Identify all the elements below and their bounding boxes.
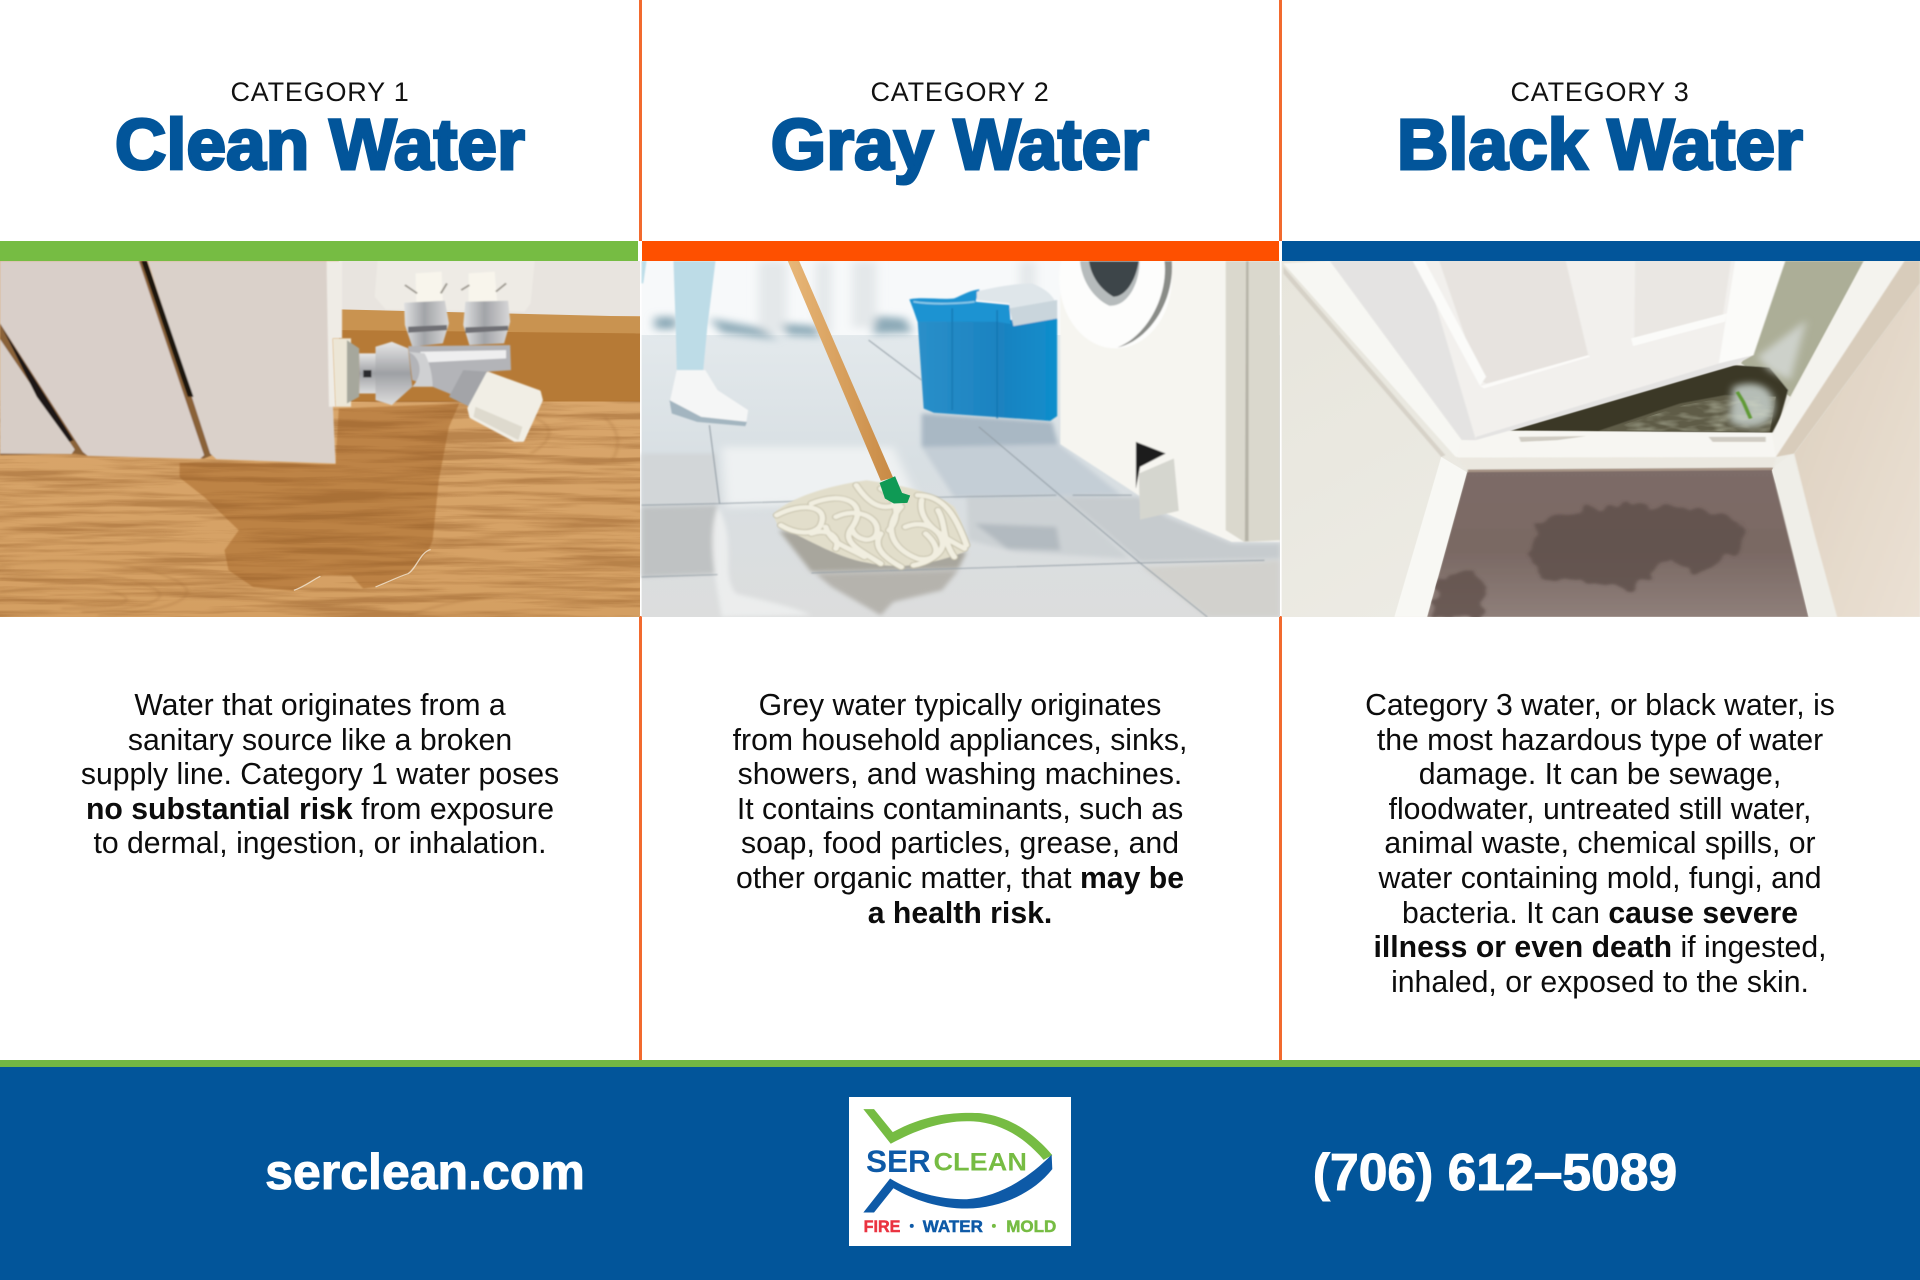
- photo: leaking radiator valve on wood floor: [0, 261, 640, 617]
- description: category 3: the most hazardous type of water: [1377, 724, 1823, 757]
- description: category 3: illness or even death if ingested,: [1373, 931, 1827, 964]
- footer band: [0, 1060, 1920, 1280]
- door frame right: [1771, 261, 1904, 457]
- panel: category 2 gray water: [640, 77, 1280, 930]
- outdoor area: [1741, 261, 1864, 397]
- description: category 3: [1365, 689, 1835, 999]
- carpet: [1427, 470, 1809, 617]
- website: serclean.com: [265, 1144, 585, 1200]
- description: category 1: to dermal, ingestion, or inhalation.: [93, 827, 547, 860]
- tile joints and reflections: [642, 413, 1280, 617]
- phone number: (706) 612–5089: [1313, 1143, 1677, 1201]
- door: [1330, 261, 1785, 441]
- description: category 2: Grey water typically originates: [759, 689, 1161, 722]
- divider: columns 2 and 3, bottom: [1278, 616, 1282, 1060]
- description: category 3: water containing mold, fungi, and: [1378, 862, 1822, 895]
- logo: wordmark: CLEAN: [933, 1148, 1027, 1176]
- mop ferrule: [880, 476, 910, 504]
- divider: columns 1 and 2, top: [638, 0, 642, 241]
- logo: Serclean fish mark: [849, 1097, 1071, 1246]
- panel: category 1 clean water: [0, 77, 640, 860]
- photo: flooded doorway with stained carpet: [1282, 261, 1920, 617]
- photo: mop on wet tile floor beside washing machine: [640, 261, 1280, 617]
- description: category 2: It contains contaminants, such as: [737, 793, 1183, 826]
- description: category 3: animal waste, chemical spills, or: [1384, 827, 1816, 860]
- door frame left: [1283, 261, 1464, 457]
- description: category 3: inhaled, or exposed to the skin.: [1391, 966, 1809, 999]
- logo: blue fish arc: [863, 1155, 1052, 1213]
- divider: columns 1 and 2, bottom: [638, 616, 642, 1060]
- divider: columns 2 and 3, top: [1278, 0, 1282, 241]
- description: category 1: no substantial risk from exposure: [86, 793, 554, 826]
- logo: green fish arc: [863, 1109, 1052, 1160]
- panel: category 3 black water: [1282, 77, 1920, 999]
- heading: gray water: Gray Water: [771, 106, 1149, 185]
- description: category 2: a health risk.: [868, 897, 1052, 930]
- description: category 1: sanitary source like a broken: [128, 724, 512, 757]
- mop handle: [788, 261, 893, 481]
- label: category 3: CATEGORY 3: [1510, 77, 1690, 107]
- description: category 3: Category 3 water, or black water, is: [1365, 689, 1835, 722]
- logo: tagline: [864, 1217, 1056, 1236]
- description: category 2: [733, 689, 1187, 930]
- dark water at door gap: [1509, 365, 1788, 433]
- label: category 1: CATEGORY 1: [230, 77, 410, 107]
- description: category 2: from household appliances, sinks,: [733, 724, 1187, 757]
- description: category 1: Water that originates from a: [134, 689, 506, 722]
- description: category 3: bacteria. It can cause severe: [1402, 897, 1798, 930]
- logo: wordmark: SER: [866, 1143, 931, 1179]
- logo: tagline: MOLD: [1006, 1217, 1056, 1236]
- radiator: [0, 261, 342, 464]
- blue colour bar: [1282, 241, 1920, 261]
- orange colour bar: [642, 241, 1278, 261]
- threshold: [1458, 431, 1776, 458]
- skirting right: [1774, 454, 1837, 617]
- description: category 1: [81, 689, 559, 860]
- right wall: [1794, 283, 1920, 617]
- water puddle: [180, 403, 459, 591]
- green colour bar: [0, 241, 638, 261]
- logo: tagline: WATER: [923, 1217, 983, 1236]
- description: category 3: floodwater, untreated still water,: [1389, 793, 1811, 826]
- valve assembly: [333, 261, 541, 440]
- label: category 2: CATEGORY 2: [870, 77, 1050, 107]
- person's leg and shoe: [642, 261, 748, 426]
- washing machine: [1059, 208, 1280, 542]
- bucket: [909, 283, 1057, 421]
- description: category 2: other organic matter, that may be: [736, 862, 1184, 895]
- description: category 2: showers, and washing machines.: [738, 758, 1182, 791]
- description: category 2: soap, food particles, grease, and: [741, 827, 1179, 860]
- mop head: [773, 480, 967, 567]
- heading: clean water: Clean Water: [115, 106, 525, 185]
- carpet water stains: [1433, 506, 1743, 617]
- heading: black water: Black Water: [1397, 106, 1803, 185]
- footer green rule: [0, 1060, 1920, 1067]
- description: category 1: supply line. Category 1 water poses: [81, 758, 559, 791]
- description: category 3: damage. It can be sewage,: [1419, 758, 1781, 791]
- logo: tagline: FIRE: [864, 1217, 900, 1236]
